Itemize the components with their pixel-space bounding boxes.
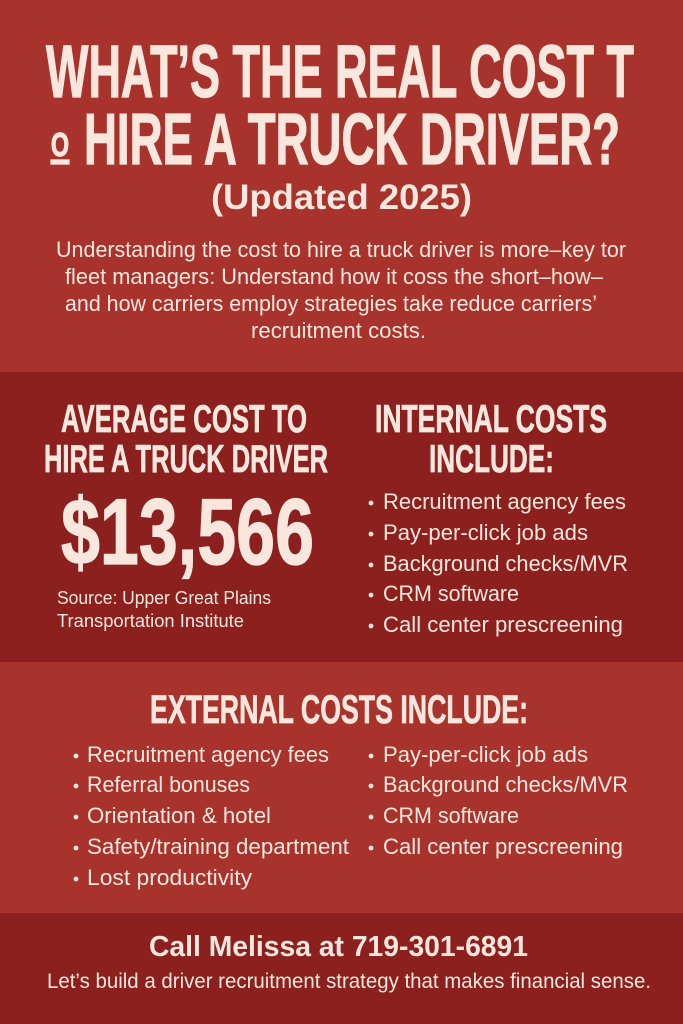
panel: call to action [0, 913, 683, 1024]
title: O [51, 126, 69, 163]
heading: internal costs [375, 398, 607, 481]
external costs list right: Pay-per-click job ads [383, 742, 588, 767]
heading: average cost: HIRE A TRUCK DRIVER [44, 438, 328, 481]
external costs list right: CRM software [383, 803, 519, 828]
internal costs list: Background checks/MVR [383, 551, 628, 576]
intro text: recruitment costs. [251, 318, 426, 343]
internal costs list: Pay-per-click job ads [383, 520, 588, 545]
external costs list right [369, 742, 628, 859]
external costs list left: Lost productivity [87, 865, 252, 890]
external costs list left: Orientation & hotel [87, 803, 271, 828]
internal costs list [369, 489, 628, 637]
intro text [56, 237, 626, 343]
internal costs list: Recruitment agency fees [383, 489, 626, 514]
panel: header [0, 0, 683, 372]
subtitle: (Updated 2025) [211, 178, 472, 217]
external costs list left: Referral bonuses [87, 772, 250, 797]
external costs list left: Recruitment agency fees [87, 742, 329, 767]
phone call heading: Call Melissa at 719-301-6891 [149, 931, 528, 963]
intro text: and how carriers employ strategies take reduce carriers’ [65, 291, 597, 316]
source note: Transportation Institute [57, 611, 244, 631]
panel: external costs [0, 662, 683, 913]
external costs list left: Safety/training department [87, 834, 349, 859]
big number: $13,566 [61, 479, 314, 584]
heading: average cost: AVERAGE COST TO [61, 398, 307, 441]
panel: average cost and internal costs [0, 372, 683, 662]
intro text: fleet managers: Understand how it coss the short–how– [65, 264, 604, 289]
external costs list right: Call center prescreening [383, 834, 623, 859]
heading: average cost [44, 398, 328, 481]
closing line: Let’s build a driver recruitment strategy that makes financial sense. [47, 970, 651, 993]
source note [57, 588, 271, 631]
internal costs list: Call center prescreening [383, 612, 623, 637]
intro text: Understanding the cost to hire a truck driver is more–key tor [56, 237, 626, 262]
external costs list left [74, 742, 349, 890]
title [46, 30, 634, 180]
source note: Source: Upper Great Plains [57, 588, 271, 608]
internal costs list: CRM software [383, 581, 519, 606]
heading: internal costs: INCLUDE: [429, 438, 554, 481]
external costs list right: Background checks/MVR [383, 772, 628, 797]
